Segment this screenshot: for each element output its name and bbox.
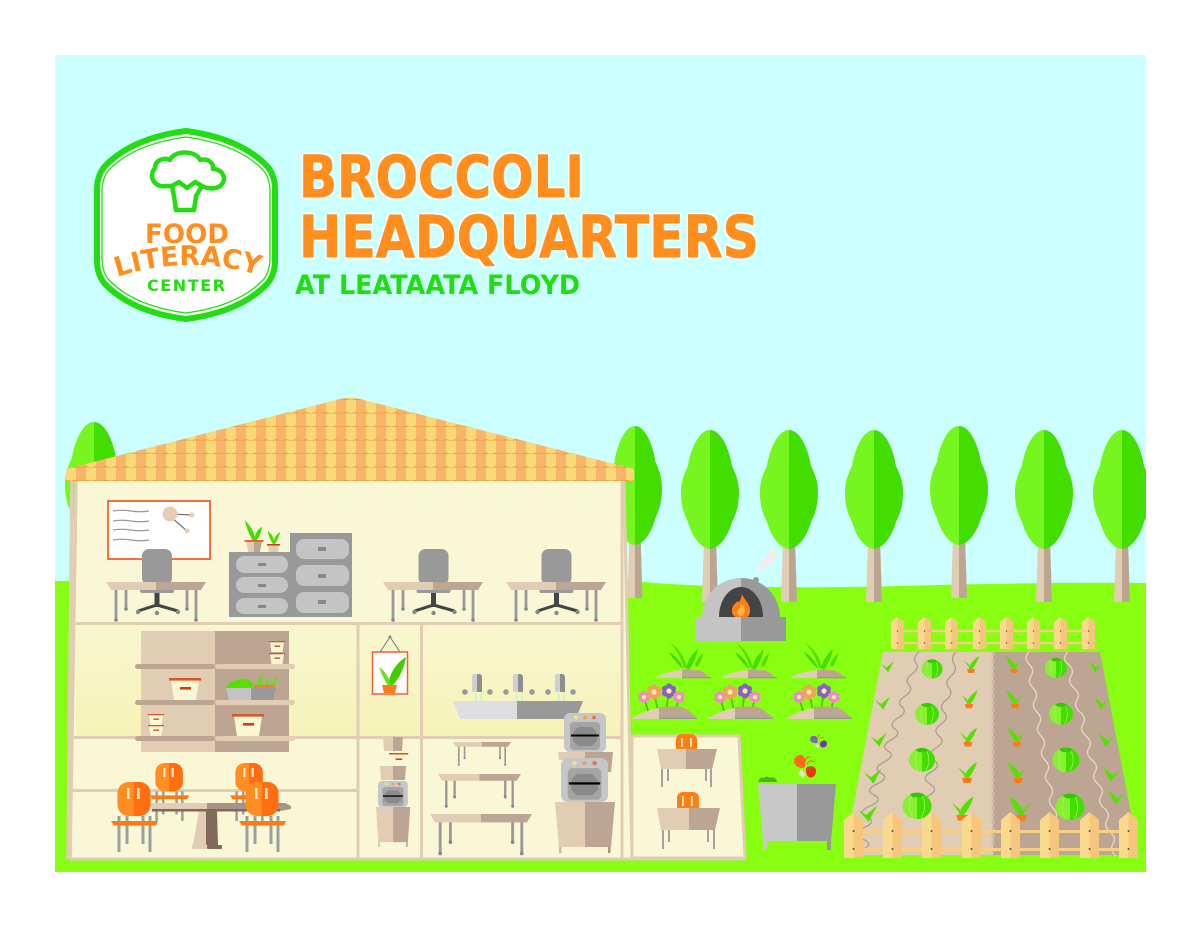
sprout beds — [654, 643, 846, 678]
grass — [55, 580, 1146, 872]
seedlings — [858, 661, 1125, 822]
flower beds — [631, 683, 852, 719]
vegetable garden — [844, 617, 1139, 858]
carrots — [952, 656, 1031, 821]
logo text: literacy — [117, 265, 258, 277]
annex room — [632, 736, 745, 858]
shelves — [135, 631, 295, 752]
sky — [55, 55, 1146, 588]
irrigation lines — [855, 652, 1116, 856]
large oven stack — [555, 713, 615, 853]
work tables — [430, 742, 532, 855]
icon: orange butterfly — [794, 755, 816, 778]
framed plant picture — [372, 636, 408, 694]
logo badge: LITERACY — [114, 245, 264, 276]
small oven stack — [376, 737, 410, 847]
bowl of greens — [226, 674, 278, 700]
garden soil — [844, 652, 993, 855]
garden front fence — [844, 812, 1138, 858]
subtitle: AT LEATAATA FLOYD — [295, 270, 580, 301]
filing cabinets — [229, 533, 352, 617]
roof — [66, 398, 634, 481]
annex desks with orange chairs — [657, 734, 720, 849]
icon: broccoli — [152, 152, 224, 210]
title: BROCCOLI — [299, 143, 584, 211]
house building — [60, 390, 745, 859]
pizza oven — [696, 549, 786, 641]
garden back fence — [891, 617, 1095, 649]
logo text: food: FOOD — [145, 219, 229, 250]
house walls — [70, 481, 631, 858]
cabbages — [902, 658, 1084, 820]
logo badge — [94, 128, 278, 322]
potted plants on cabinet — [244, 520, 280, 552]
whiteboard — [108, 501, 210, 559]
title — [302, 152, 758, 268]
icon: purple butterfly — [810, 735, 827, 748]
flame — [732, 594, 750, 618]
logo text: center: CENTER — [147, 276, 225, 295]
smoke — [756, 549, 778, 572]
dining table and chairs — [111, 763, 291, 852]
sink — [453, 674, 583, 719]
office desks and chairs — [106, 549, 606, 622]
title: HEADQUARTERS — [299, 203, 759, 271]
structural beams — [70, 624, 745, 859]
planter with butterflies — [758, 735, 836, 850]
tree line — [65, 422, 1151, 602]
